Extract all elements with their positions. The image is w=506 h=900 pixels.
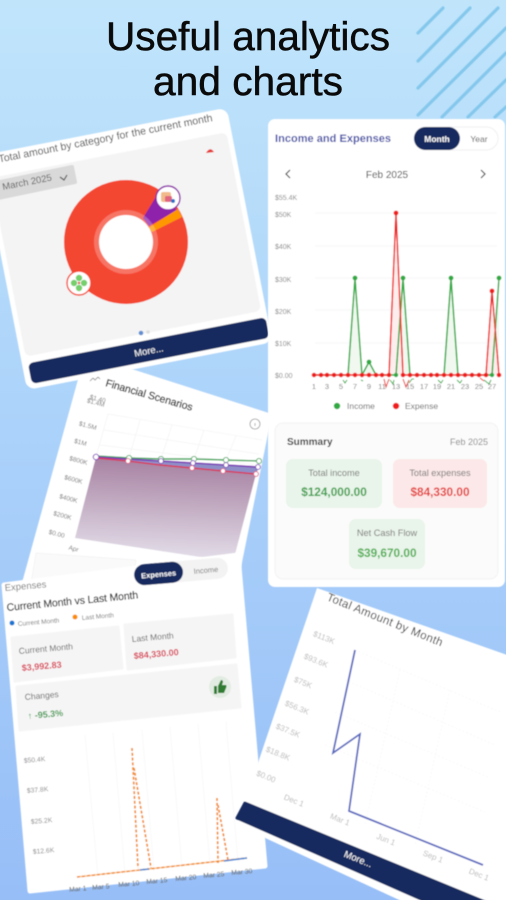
stat: total income: $124,000.00: [301, 485, 367, 499]
axis labels: Sep 1: [422, 849, 445, 865]
more button: [237, 803, 490, 900]
more button: More...: [133, 343, 164, 360]
comparison line chart: Mar 25: [203, 871, 225, 880]
icon: small header glyph: [90, 377, 100, 381]
icon: purple category badge: [156, 186, 180, 210]
stat: net cash flow: $39,670.00: [357, 546, 417, 560]
axis labels: $75K: [293, 675, 314, 691]
axis labels: Dec 1: [283, 793, 306, 809]
comparison line chart: Mar 10: [118, 880, 140, 889]
stat: changes: ↑ -95.3%: [27, 708, 64, 721]
title: [106, 15, 390, 104]
axis labels: Apr: [68, 545, 80, 554]
axis labels: $1M: [73, 438, 87, 448]
pale lower panel: [30, 553, 136, 590]
line chart: income and expense: 21: [447, 382, 455, 391]
stat: total expenses: Total expenses: [409, 468, 471, 478]
heading: current month vs last month: Current Month vs Last Month: [6, 589, 139, 614]
axis labels: $56.3K: [283, 699, 311, 717]
line chart: income and expense: $55.4K: [275, 195, 298, 202]
axis labels: $1.4M: [86, 397, 105, 409]
comparison line chart: Mar 1: [69, 885, 87, 894]
chart legend: [334, 401, 438, 411]
chart legend: Income: [347, 401, 375, 411]
heading: total amount by month: Total Amount by Month: [325, 592, 444, 649]
panel: category donut: [0, 108, 272, 390]
axis labels: $1.40: [89, 394, 107, 405]
comparison line chart: [24, 722, 253, 894]
panel: current month vs last month: [4, 555, 265, 894]
line chart: income and expense: 5: [339, 382, 343, 391]
monthly line chart: [333, 650, 483, 865]
line chart: income and expense: 27: [488, 382, 496, 391]
axis labels: $18.8K: [264, 745, 292, 763]
line chart: income and expense: 15: [406, 382, 414, 391]
icon: thumbs up: [209, 676, 231, 698]
comparison line chart: $37.8K: [27, 786, 49, 795]
axis labels: $800K: [68, 455, 89, 467]
line chart: income and expense: 19: [433, 382, 441, 391]
line chart: income and expense: $40K: [275, 244, 292, 251]
axis labels: $93.6K: [302, 652, 330, 670]
month year toggle: Month: [424, 134, 450, 144]
comparison line chart: Mar 5: [92, 883, 110, 892]
panel: financial scenarios: [20, 354, 272, 602]
axis labels: Jun 1: [375, 832, 397, 848]
axis labels: $0.00: [255, 769, 277, 785]
heading: financial scenarios: Financial Scenarios: [104, 377, 194, 414]
scenario area chart: [75, 454, 262, 562]
legend: [10, 612, 115, 628]
more button: More...: [342, 849, 374, 870]
axis labels: [255, 629, 491, 883]
axis labels: Dec 1: [468, 867, 491, 883]
line chart: income and expense: 1: [312, 382, 316, 391]
donut chart: [64, 180, 188, 304]
axis labels: $113K: [312, 629, 337, 646]
panel: total amount by month: [237, 588, 506, 900]
chart grid: [325, 650, 500, 845]
label: expenses: Expenses: [4, 579, 47, 594]
stat: current month: [12, 627, 122, 681]
more button: [28, 317, 269, 384]
stat: net cash flow: [349, 519, 425, 569]
line chart: income and expense: $30K: [275, 277, 292, 284]
line chart: income and expense: 17: [420, 382, 428, 391]
axis labels: $37.5K: [274, 722, 302, 740]
month selector chip: March 2025: [1, 173, 53, 193]
month year toggle: [414, 127, 498, 150]
stat: last month: Last Month: [131, 630, 174, 644]
comparison line chart: Mar 30: [231, 868, 253, 877]
line chart: income and expense: $20K: [275, 309, 292, 316]
comparison line chart: Mar 20: [175, 874, 197, 883]
chart grid: [96, 414, 262, 465]
legend: Last Month: [82, 612, 115, 622]
month navigator: [286, 170, 485, 181]
line chart: income and expense: 11: [378, 382, 386, 391]
stat: total income: Total income: [308, 468, 360, 478]
axis labels: Mar 1: [329, 812, 352, 828]
stat: total income: [286, 459, 382, 508]
stat: total expenses: [393, 459, 487, 508]
line chart: income and expense: 23: [461, 382, 469, 391]
comparison line chart: $50.4K: [24, 756, 46, 765]
panel: summary: Feb 2025: [450, 437, 488, 447]
icon: mini red indicator: [206, 149, 214, 153]
expenses income toggle: Expenses: [141, 568, 176, 580]
stat: last month: [125, 615, 235, 669]
decorative diagonal stripes: [418, 8, 506, 117]
axis labels: $0.00: [48, 529, 66, 540]
line chart: income and expense: 13: [392, 382, 400, 391]
stat: changes: Changes: [24, 689, 59, 702]
stat: total expenses: $84,330.00: [410, 485, 470, 499]
month year toggle: Year: [470, 134, 488, 144]
month selector chip: [0, 167, 75, 198]
legend: Current Month: [18, 617, 60, 628]
comparison line chart: $12.6K: [33, 847, 55, 856]
axis labels: $400K: [58, 493, 79, 505]
panel: income and expenses: [268, 119, 505, 587]
stat: current month: Current Month: [18, 641, 74, 656]
panel: summary: Summary: [287, 437, 333, 448]
line chart: income and expense: $10K: [275, 341, 292, 348]
title: Useful analytics: [106, 15, 390, 59]
stat: changes: [17, 665, 240, 730]
line chart: income and expense: 9: [367, 382, 371, 391]
axis labels: $200K: [52, 510, 73, 522]
comparison line chart: Mar 15: [146, 877, 168, 886]
heading: income and expenses: Income and Expenses: [275, 133, 391, 145]
line chart: income and expense: 7: [353, 382, 357, 391]
stat: last month: $84,330.00: [133, 647, 179, 661]
comparison line chart: $25.2K: [31, 817, 53, 826]
line chart: income and expense: 3: [325, 382, 329, 391]
expenses income toggle: [133, 557, 229, 586]
expenses income toggle: Income: [193, 565, 219, 576]
axis labels: $1.5M: [78, 420, 97, 432]
line chart: income and expense: $0.00: [275, 373, 293, 380]
title: and charts: [153, 60, 343, 104]
icon: red category badge: [67, 271, 91, 295]
panel: summary: [275, 423, 498, 579]
stat: net cash flow: Net Cash Flow: [357, 528, 417, 538]
axis labels: [48, 394, 107, 554]
line chart: income and expense: [275, 195, 501, 391]
line chart: income and expense: $50K: [275, 212, 292, 219]
axis labels: $600K: [63, 474, 84, 486]
info icon: [250, 419, 260, 429]
heading: total amount by category: Total amount by category for the current month: [0, 112, 214, 165]
page dots: [139, 330, 150, 335]
month navigator: Feb 2025: [366, 170, 409, 181]
stat: current month: $3,992.83: [21, 660, 62, 673]
line chart: income and expense: 25: [475, 382, 483, 391]
chart legend: Expense: [405, 401, 438, 411]
